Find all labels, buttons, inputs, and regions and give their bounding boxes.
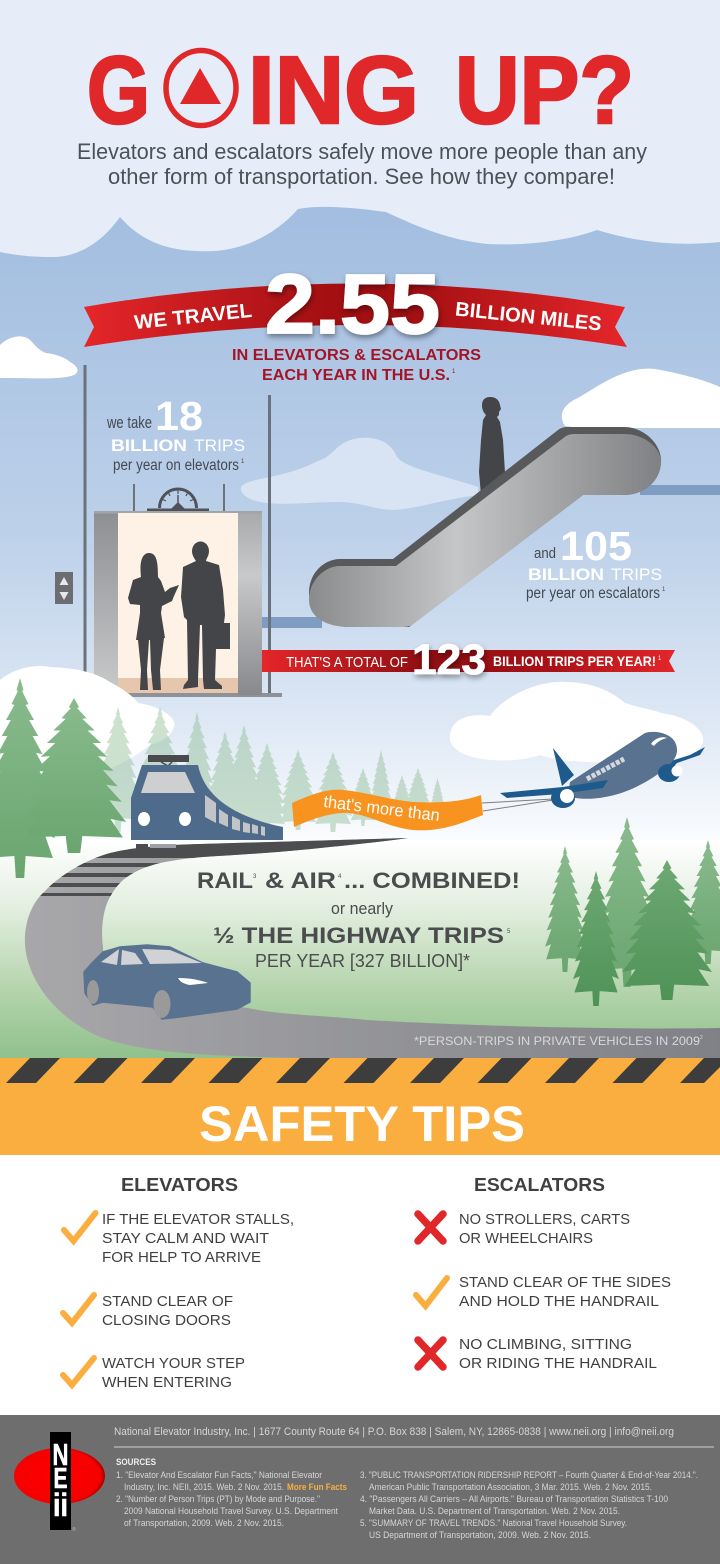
tip list: STAY CALM AND WAIT xyxy=(102,1231,269,1247)
address line: National Elevator Industry, Inc. | 1677 County Route 64 | P.O. Box 838 | Salem, NY, 12865-0838 | www.neii.org | info@neii.org xyxy=(114,1426,674,1438)
icons: check marks xyxy=(63,1213,96,1385)
comparison text: 3 xyxy=(253,874,257,880)
cloud: lower left xyxy=(0,666,175,800)
tip list: WATCH YOUR STEP xyxy=(102,1356,245,1372)
logo: NEII: N xyxy=(52,1437,68,1472)
miles caption: 1 xyxy=(452,369,456,375)
hazard stripes xyxy=(6,1058,720,1083)
sources column 1: of Transportation, 2009. Web. 2 Nov. 2015. xyxy=(124,1518,284,1528)
cloud: middle pale xyxy=(241,438,478,510)
silhouette: man with briefcase xyxy=(181,542,230,689)
sources column 1: 2. "Number of Person Trips (PT) by Mode and Purpose." xyxy=(116,1494,320,1504)
panel: elevator tips xyxy=(63,1174,294,1391)
comparison text: 4 xyxy=(338,874,342,880)
logo: NEII: E xyxy=(54,1463,68,1495)
elevator car xyxy=(94,511,262,695)
sources column 1: Industry, Inc. NEII, 2015. Web. 2 Nov. 2015. xyxy=(124,1482,284,1492)
comparison text: 5 xyxy=(507,929,511,935)
stat: elevator trips: BILLION xyxy=(111,436,187,455)
ribbon text: billion miles: BILLION MILES xyxy=(454,298,603,336)
railway track xyxy=(40,838,408,896)
train xyxy=(131,755,283,849)
sources column 1: More Fun Facts xyxy=(287,1482,347,1492)
tip list: FOR HELP TO ARRIVE xyxy=(102,1250,261,1266)
tip list xyxy=(102,1212,294,1391)
sources column 2: 5. "SUMMARY OF TRAVEL TRENDS." National Travel Household Survey. xyxy=(360,1518,627,1528)
plane towing banner xyxy=(292,732,705,830)
elevator shaft rails xyxy=(84,365,282,697)
sources column 2: US Department of Transportation, 2009. Web. 2 Nov. 2015. xyxy=(369,1530,591,1540)
cloud: upper left xyxy=(0,336,77,378)
conveyor belts xyxy=(262,485,720,628)
tip list: STAND CLEAR OF THE SIDES xyxy=(459,1275,671,1291)
comparison text: ½ THE HIGHWAY TRIPS xyxy=(213,923,504,948)
stat: elevator trips: TRIPS xyxy=(194,436,245,455)
panel: footer xyxy=(0,1415,720,1564)
miles ribbon xyxy=(84,257,627,351)
sources column 1: 2009 National Household Travel Survey. U.S. Department xyxy=(124,1506,338,1516)
pale background forest xyxy=(96,707,445,837)
icon: elevator up button as letter O xyxy=(166,50,236,126)
miles caption: IN ELEVATORS & ESCALATORS xyxy=(232,347,481,364)
tip list: NO STROLLERS, CARTS xyxy=(459,1212,630,1228)
total trips ribbon: THAT'S A TOTAL OF xyxy=(286,655,408,671)
miles caption: EACH YEAR IN THE U.S. xyxy=(262,367,450,384)
logo: NEII: ® xyxy=(72,1526,76,1533)
tip list: AND HOLD THE HANDRAIL xyxy=(459,1294,659,1310)
heading: elevators: ELEVATORS xyxy=(121,1174,238,1195)
escalator xyxy=(309,427,661,627)
cloud: lower right xyxy=(450,682,703,762)
sources column 2: Market Data. U.S. Department of Transportation. Web. 2 Nov. 2015. xyxy=(369,1506,620,1516)
icon: check mark xyxy=(416,1278,447,1306)
total trips ribbon: BILLION TRIPS PER YEAR! xyxy=(493,653,656,669)
silhouette: woman with tablet xyxy=(128,553,179,690)
tip list: OR RIDING THE HANDRAIL xyxy=(459,1356,657,1372)
stat: escalator trips: BILLION xyxy=(528,565,604,584)
logo: NEII xyxy=(14,1432,105,1533)
title: UP? xyxy=(455,37,634,144)
heading: safety tips: SAFETY TIPS xyxy=(199,1096,525,1152)
stat: elevator trips: per year on elevators xyxy=(113,457,239,474)
comparison text: PER YEAR [327 BILLION]* xyxy=(255,951,470,971)
total trips ribbon xyxy=(262,636,675,684)
tip list: WHEN ENTERING xyxy=(102,1375,232,1391)
cloud: upper right xyxy=(562,369,720,428)
safety tips banner xyxy=(0,1058,720,1155)
stat: escalator trips xyxy=(526,523,666,602)
icon: floor indicator dial xyxy=(147,489,209,511)
sources heading: SOURCES xyxy=(116,1457,156,1467)
road xyxy=(24,838,720,1058)
silhouette: man on escalator xyxy=(479,397,505,495)
ribbon text: we travel: WE TRAVEL xyxy=(133,300,253,334)
header cloud panel xyxy=(0,0,720,257)
stat: elevator trips xyxy=(106,393,245,474)
logo: NEII: ii xyxy=(53,1487,68,1523)
orange banner: that's more than xyxy=(322,792,441,825)
sources column 2: American Public Transportation Association, 3 Mar. 2015. Web. 2 Nov. 2015. xyxy=(369,1482,652,1492)
stat: escalator trips: TRIPS xyxy=(611,565,662,584)
stat: escalator trips: 1 xyxy=(662,587,666,593)
heading: escalators: ESCALATORS xyxy=(474,1174,605,1195)
comparison text: RAIL xyxy=(197,868,253,893)
stat: elevator trips: we take xyxy=(106,413,152,432)
background: ground xyxy=(0,840,720,1060)
title: ING xyxy=(248,37,419,144)
footnote: 2 xyxy=(700,1035,703,1041)
panel: escalator tips xyxy=(416,1174,671,1372)
tip list xyxy=(459,1212,671,1372)
sources column 2: 4. "Passengers All Carriers – All Airports." Bureau of Transportation Statistics T-100 xyxy=(360,1494,668,1504)
right foreground trees xyxy=(545,817,720,1006)
title: G xyxy=(87,37,150,144)
stat: escalator trips: and xyxy=(534,545,556,562)
tip list: IF THE ELEVATOR STALLS, xyxy=(102,1212,294,1228)
icon: elevator call buttons xyxy=(55,572,73,604)
tip list: STAND CLEAR OF xyxy=(102,1294,233,1310)
tip list: NO CLIMBING, SITTING xyxy=(459,1337,632,1353)
sources column 1: 1. "Elevator And Escalator Fun Facts," National Elevator xyxy=(116,1470,322,1480)
total trips ribbon: 123 xyxy=(412,636,486,684)
tip list: CLOSING DOORS xyxy=(102,1313,231,1329)
orange banner xyxy=(292,790,483,830)
icons: cross marks xyxy=(418,1214,443,1367)
comparison text: & AIR xyxy=(265,868,336,893)
stat: escalator trips: per year on escalators xyxy=(526,585,660,602)
miles caption xyxy=(232,347,481,384)
icon: airplane xyxy=(500,732,705,808)
total trips ribbon: 1 xyxy=(658,656,662,662)
stat: elevator trips: 18 xyxy=(155,393,203,439)
subtitle: other form of transportation. See how they compare! xyxy=(108,164,615,189)
title xyxy=(87,37,634,144)
background: sky xyxy=(0,200,720,860)
subtitle: Elevators and escalators safely move more people than any xyxy=(77,139,647,164)
sources column 1 xyxy=(116,1470,347,1528)
comparison text: or nearly xyxy=(331,899,393,918)
comparison text xyxy=(197,868,520,971)
car xyxy=(84,945,250,1019)
tip list: OR WHEELCHAIRS xyxy=(459,1231,593,1247)
subtitle xyxy=(77,139,647,189)
sources column 2 xyxy=(360,1470,698,1540)
stat: elevator trips: 1 xyxy=(241,459,245,465)
footnote: *PERSON-TRIPS IN PRIVATE VEHICLES IN 2009 xyxy=(414,1034,700,1048)
left foreground trees xyxy=(0,678,126,878)
stat: escalator trips: 105 xyxy=(560,523,632,569)
big number 2.55: 2.55 xyxy=(265,257,440,351)
comparison text: ... COMBINED! xyxy=(344,868,520,893)
